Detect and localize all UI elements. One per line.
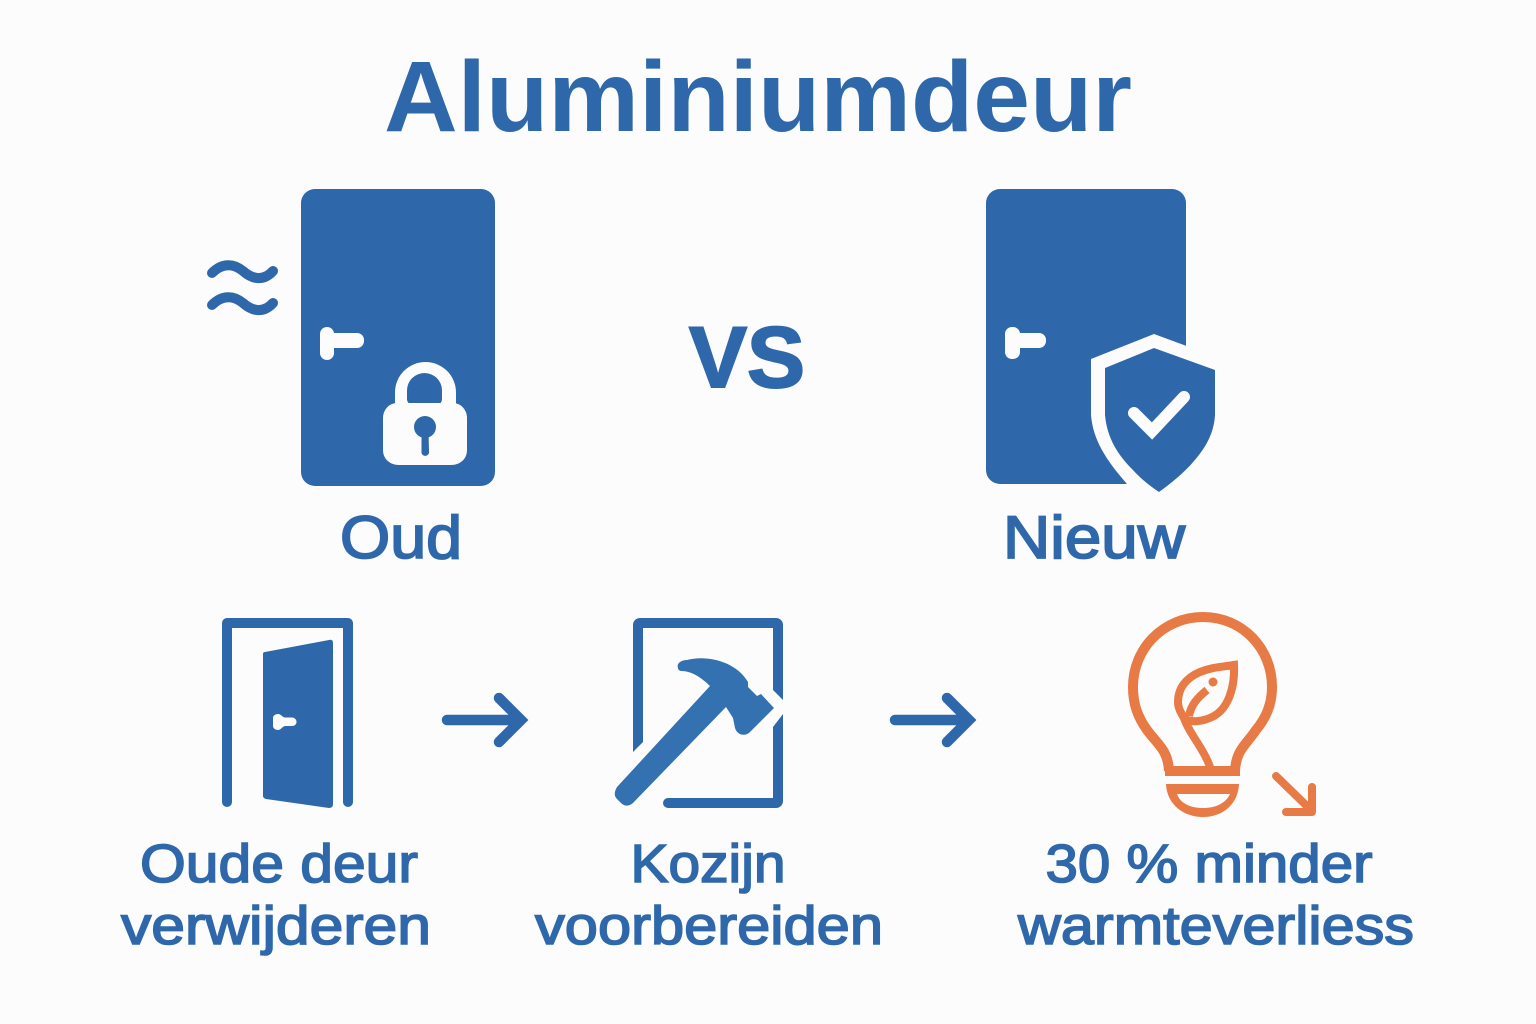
arrow: step one to two xyxy=(447,698,521,742)
label: new: Nieuw xyxy=(1003,504,1186,571)
icon: draught waves xyxy=(212,265,273,310)
title: Aluminiumdeur xyxy=(384,41,1132,153)
step label: prepare frame: voorbereiden xyxy=(535,896,883,956)
icon: light bulb with leaf xyxy=(1133,617,1312,817)
icon: old door with lock xyxy=(301,189,495,486)
arrow: step two to three xyxy=(895,698,969,742)
step label: heat loss: warmteverliess xyxy=(1017,896,1414,956)
step label: heat loss: 30 % minder xyxy=(1046,834,1373,894)
step label: prepare frame: Kozijn xyxy=(630,834,786,894)
icon: frame and hammer xyxy=(615,618,783,808)
step label: remove door: Oude deur xyxy=(140,834,418,894)
icon: new door with shield xyxy=(986,189,1215,500)
label: old: Oud xyxy=(340,504,462,571)
vs label: VS xyxy=(689,310,805,406)
icon: door removal xyxy=(227,623,348,808)
step label: remove door: verwijderen xyxy=(121,896,431,956)
